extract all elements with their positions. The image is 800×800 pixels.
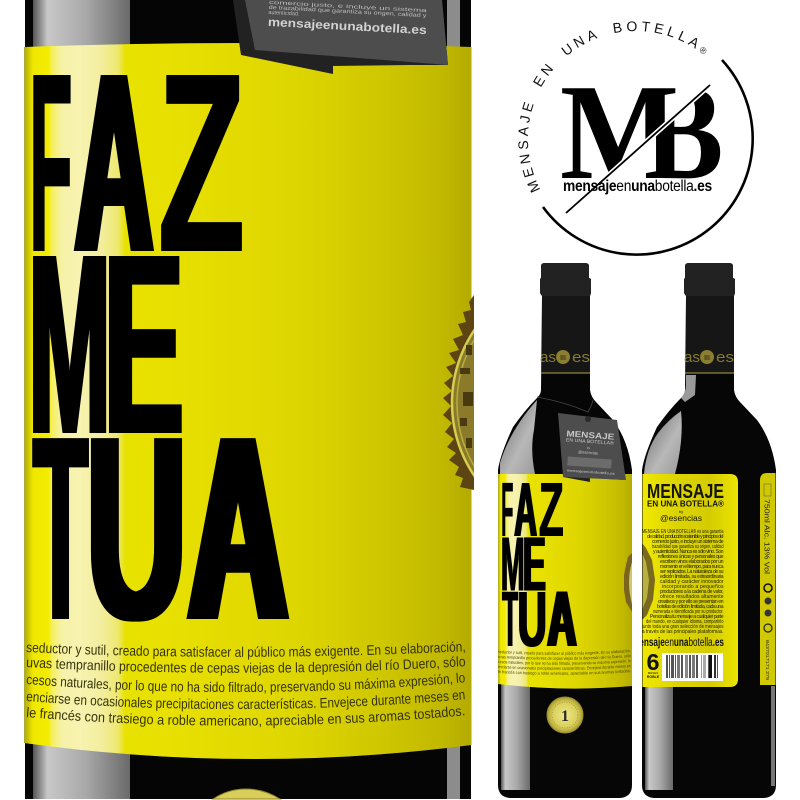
description paragraph: comercio justo, e incluye un sistema de bbox=[652, 539, 724, 545]
tag string bbox=[537, 397, 593, 412]
label body copy small: le francés con trasiego a roble americano, apreciable en sus aromas tostados. bbox=[498, 670, 631, 676]
six months oak badge: MESES bbox=[648, 671, 658, 675]
neck gold lettering bbox=[684, 349, 734, 366]
tag text bbox=[268, 0, 429, 37]
description paragraph: productores a la cadena de valor, bbox=[660, 589, 724, 595]
recycling icons bbox=[764, 584, 772, 592]
word FAZ: Z bbox=[159, 20, 244, 306]
description paragraph: calidad y carácter innovador bbox=[660, 579, 724, 585]
icon: gold medal: 1 bbox=[561, 708, 569, 725]
description paragraph: Personaliza tu mensaje a cualquier parte bbox=[650, 614, 724, 620]
circle arc bbox=[543, 60, 753, 255]
headline small: FAZ ME TUA: M bbox=[501, 522, 525, 608]
six months oak badge: ROBLE bbox=[647, 675, 660, 679]
description paragraph: escriben vinos elaborados por un bbox=[660, 559, 724, 565]
brand heading: EN UNA BOTELLA® bbox=[647, 498, 725, 508]
six months oak badge bbox=[647, 654, 659, 678]
label body copy: cesos naturales, por lo que no ha sido filtrado, preservando su máxima expresión, lo bbox=[26, 672, 465, 695]
word FAZ: A bbox=[75, 19, 153, 306]
shoulder highlight bbox=[500, 400, 537, 474]
capsule top bbox=[684, 263, 735, 296]
description paragraph: edición limitada, su extraordinaria bbox=[660, 574, 724, 580]
seal at left of back label bbox=[642, 543, 655, 620]
headline small: FAZ ME TUA: F bbox=[501, 466, 514, 552]
description paragraph: reflexiones únicas y personales que bbox=[658, 554, 724, 560]
left glass highlight bbox=[33, 0, 130, 799]
monogram M: M bbox=[560, 57, 679, 208]
label body copy: seductor y sutil, creado para satisfacer al público más exigente. En su elaboración, bbox=[26, 641, 465, 660]
neck gold lettering bbox=[540, 349, 590, 366]
website: mensajeenunabotella.es bbox=[563, 178, 712, 195]
label body copy: le francés con trasiego a roble americano, apreciable en sus aromas tostados. bbox=[26, 706, 464, 728]
label body copy small: seductor y sutil, creado para satisfacer al público más exigente. En su elaboración, bbox=[498, 649, 630, 656]
bottle silhouette bbox=[642, 263, 776, 798]
icon: gold serrated seal at label edge bbox=[443, 295, 474, 490]
label body copy: enciarse en ocasionales precipitaciones características. Envejece durante meses en bbox=[26, 692, 465, 712]
back label contents bbox=[642, 484, 724, 681]
back bottle bbox=[632, 263, 776, 798]
headline small: FAZ ME TUA: A bbox=[548, 575, 576, 664]
bottle body glass bbox=[25, 0, 471, 799]
front bottle bbox=[498, 263, 632, 798]
neck bbox=[686, 296, 734, 373]
description paragraph: del mundo, en cualquier idioma, compartirlo bbox=[646, 619, 724, 625]
label body copy small: uvas tempranillo procedentes de cepas viejas de la depresión del río Duero, sólo bbox=[498, 654, 631, 661]
description paragraph: numerada e identificada por su productor. bbox=[653, 609, 724, 615]
description paragraph: a través de las principales plataformas. bbox=[642, 629, 724, 635]
word FAZ bbox=[29, 19, 244, 306]
bottle silhouette bbox=[498, 263, 632, 798]
neck gold lettering: es bbox=[572, 349, 590, 366]
yellow label bbox=[24, 43, 472, 759]
seal at label edge bbox=[624, 553, 632, 612]
side strip text: 750ml Alc. 13% Vol bbox=[762, 499, 770, 575]
hanging tag on large bottle bbox=[233, 0, 448, 74]
word TUA: U bbox=[87, 381, 186, 675]
headline: FAZ ME TUA bbox=[28, 19, 287, 676]
neck gold lettering: as bbox=[684, 349, 700, 366]
brand heading bbox=[648, 484, 724, 522]
barcode bbox=[662, 653, 723, 681]
word ME bbox=[28, 202, 183, 488]
icon: gold medal on base bbox=[213, 789, 280, 799]
icon: gold medal bbox=[547, 697, 583, 733]
headline small: FAZ ME TUA: Z bbox=[539, 467, 564, 553]
back label bbox=[642, 474, 738, 687]
tag text: mensajeenunabotella.es bbox=[567, 468, 615, 476]
label body copy bbox=[26, 641, 466, 728]
label body copy small: cesos naturales, por lo que no ha sido filtrado, preservando su máxima expresión, lo bbox=[498, 659, 631, 666]
description paragraph: de calidad, producción sostenible y principios del bbox=[647, 534, 724, 540]
tag bbox=[537, 397, 626, 482]
description paragraph: trazabilidad que garantiza su origen, calidad bbox=[652, 544, 724, 550]
description paragraph: junto toda una gran selección de mensajes bbox=[641, 624, 724, 630]
word FAZ: F bbox=[29, 19, 73, 305]
website: mensajeenunabotella.es bbox=[632, 637, 724, 649]
word TUA bbox=[33, 381, 287, 676]
description paragraph: creativos y por ello se presentan en bbox=[658, 599, 724, 605]
word TUA: T bbox=[33, 381, 88, 675]
label body copy small: enciarse en ocasionales precipitaciones características. Envejece durante meses en bbox=[498, 664, 631, 671]
neck highlight bbox=[681, 375, 696, 402]
tag text: MENSAJE bbox=[566, 428, 615, 442]
label body copy: uvas tempranillo procedentes de cepas viejas de la depresión del río Duero, sólo bbox=[26, 656, 466, 676]
description paragraph: ser replicados. La naturaleza de su bbox=[660, 569, 724, 575]
description paragraph: momento en el tiempo, para nunca bbox=[660, 564, 724, 570]
description paragraph: incorporando a pequeños bbox=[662, 584, 724, 590]
side strip text: 8437017171 279 bbox=[765, 640, 770, 681]
tag text: EN UNA BOTELLA® bbox=[566, 436, 615, 447]
description paragraph: ofrece resultados altamente bbox=[660, 594, 724, 600]
word TUA: A bbox=[189, 383, 287, 676]
neck bbox=[542, 296, 590, 373]
six months oak badge: 6 bbox=[646, 649, 660, 675]
headline small: FAZ ME TUA: U bbox=[518, 576, 547, 664]
tag text: autenticidad. bbox=[268, 10, 300, 18]
tag text: mensajeenunabotella.es bbox=[268, 15, 427, 37]
label body copy small bbox=[498, 649, 631, 676]
lower highlight bbox=[645, 687, 673, 790]
brand heading: by bbox=[679, 509, 683, 514]
word ME: M bbox=[28, 202, 111, 488]
neck gold lettering: es bbox=[716, 349, 734, 366]
description paragraph: y autenticidad. Nunca es sólo vino. Son bbox=[653, 549, 724, 555]
headline small: FAZ ME TUA bbox=[501, 466, 576, 664]
lower highlight bbox=[501, 684, 530, 790]
word ME: E bbox=[104, 202, 183, 488]
brand heading: @esencias bbox=[660, 514, 702, 523]
diagonal line bbox=[566, 85, 710, 213]
shoulder highlight bbox=[644, 411, 682, 474]
capsule gold line bbox=[685, 372, 734, 374]
neck gold lettering: III bbox=[704, 355, 710, 362]
brand heading: MENSAJE bbox=[647, 481, 724, 503]
description paragraph bbox=[641, 528, 724, 635]
headline small: FAZ ME TUA: A bbox=[514, 468, 537, 553]
circular wordmark: MENSAJE EN UNA BOTELLA® bbox=[518, 21, 706, 193]
tag text: by bbox=[587, 446, 591, 450]
tag text bbox=[564, 428, 618, 476]
side strip label bbox=[760, 473, 776, 685]
headline small: FAZ ME TUA: E bbox=[523, 521, 546, 607]
right rim highlight bbox=[771, 686, 775, 786]
monogram B: B bbox=[644, 56, 723, 208]
right glass highlight bbox=[447, 0, 460, 799]
description paragraph: MENSAJE EN UNA BOTELLA® es una garantía bbox=[642, 528, 724, 535]
side strip text bbox=[762, 484, 772, 681]
capsule top bbox=[540, 263, 591, 296]
tag text: comercio justo, e incluye un sistema bbox=[269, 0, 429, 14]
description paragraph: botellas de edición limitada, cada una bbox=[657, 604, 724, 610]
neck gold lettering: as bbox=[540, 349, 556, 366]
tag text: @esencias bbox=[578, 449, 598, 456]
large bottle close-up bbox=[24, 0, 474, 800]
tag text: de trazabilidad que garantiza su origen, calidad y bbox=[268, 5, 427, 19]
yellow label bbox=[498, 474, 632, 689]
headline small: FAZ ME TUA: T bbox=[502, 576, 518, 664]
neck gold lettering: III bbox=[560, 355, 566, 362]
capsule gold line bbox=[541, 372, 590, 374]
logo: Mensaje en una botella bbox=[518, 21, 754, 256]
